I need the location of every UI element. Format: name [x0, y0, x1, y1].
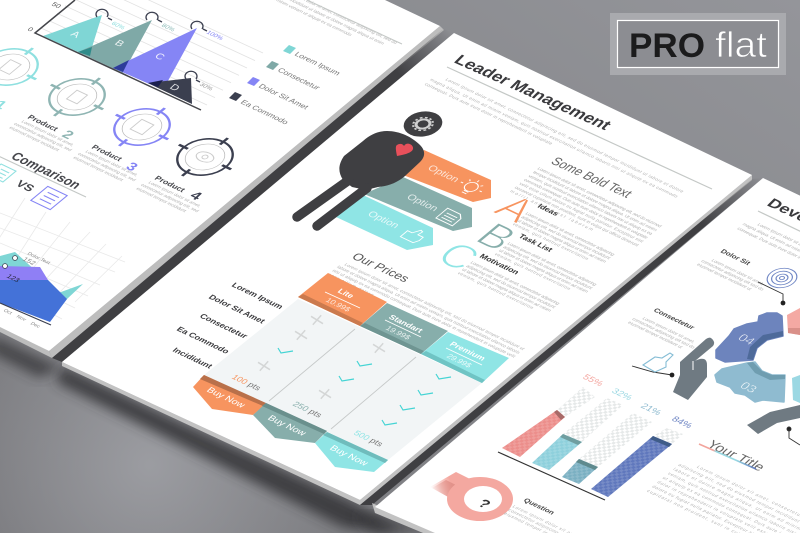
letters A B C: B [466, 215, 527, 258]
table row labels: Dolor Sit Amet [207, 293, 268, 325]
bar chart: triangle chart [26, 0, 263, 110]
callout: dolor sit: consectetur adipiscing elit sed do [700, 259, 766, 292]
callout: consectetur: Consectetur [652, 307, 696, 331]
callout: consectetur: eiusmod tempor incididunt ut [627, 320, 684, 349]
shadow under center page [56, 366, 400, 533]
button: buy now cyan: Buy Now [327, 444, 370, 468]
icon: document cyan [0, 164, 16, 182]
header: premium: 29.99$ [445, 352, 474, 369]
shadow under left page [0, 335, 62, 378]
option descriptions: Lorem ipsum dolor sit amet, consectetur adipiscing [524, 211, 616, 257]
gear segment 03: 03 [737, 380, 760, 395]
legend [229, 45, 343, 126]
option descriptions: adipiscing elit, sed do eiusmod tempor incididunt [502, 245, 594, 290]
option arrow teal: Option [404, 193, 440, 214]
option descriptions [457, 211, 617, 316]
icon: target product 2 [28, 66, 126, 128]
button: buy now teal [253, 403, 327, 443]
product labels [0, 98, 205, 203]
header: lite [298, 273, 387, 326]
header: premium [421, 332, 509, 383]
product descriptions: Lorem ipsum dolor sit amet, [84, 149, 139, 177]
header: standard [360, 303, 448, 354]
paragraph: commodo consequat. Duis aute irure dolor in reprehenderit in voluptate [523, 178, 650, 240]
option descriptions: Lorem ipsum dolor sit amet, consectetur adipiscing [469, 260, 561, 306]
gear segment 01 [787, 308, 800, 335]
icon: target [761, 265, 800, 291]
header: lite: 10.99$ [324, 296, 353, 313]
callout: dolor sit: eiusmod tempor incididunt ut [696, 262, 753, 291]
option arrow orange: Option [425, 164, 461, 185]
badge: PRO flat logo: flat [715, 24, 767, 65]
prices paragraph: esse cillum dolore [327, 272, 375, 297]
callout: consectetur: consectetur adipiscing elit sed do [631, 317, 697, 350]
button: buy now teal: Buy Now [265, 414, 308, 438]
product descriptions: consectetur adipiscing elit, sed [13, 122, 74, 152]
paragraph: veniam, quis nostrud exercitation ullamco laboris nisi ut aliquip ex ea [527, 174, 654, 236]
legend: Ea Commodo [239, 98, 291, 126]
panel: right page [372, 178, 800, 533]
icon: document blue [31, 186, 67, 210]
icon: gray hand upper [673, 338, 714, 400]
shadow under right page [355, 513, 440, 533]
bar chart: percentages: 84% [669, 415, 695, 431]
option descriptions: Lorem ipsum dolor sit amet, consectetur adipiscing [506, 241, 598, 287]
table row labels: Lorem Ipsum [230, 281, 286, 311]
product descriptions: eiusmod tempor incididunt [135, 187, 188, 213]
bar chart: triangle chart: B [112, 39, 126, 49]
product descriptions: Lorem ipsum dolor sit amet, [20, 119, 75, 147]
product labels: 3 [122, 160, 141, 174]
callout: dolor sit: Dolor Sit [719, 248, 753, 267]
our prices heading: Our Prices [349, 251, 412, 284]
badge: PRO flat logo [610, 13, 786, 75]
area chart: Dec [29, 321, 42, 330]
option descriptions: ut labore et dolore magna aliqua ut enim ad minim [516, 218, 608, 264]
button: buy now cyan [315, 432, 388, 472]
table row labels [171, 281, 286, 370]
paragraph: tempor incididunt ut labore et dolore magna aliqua. Ut enim ad minim [532, 170, 659, 232]
icon: target product 4 [156, 126, 254, 188]
intro text: Lorem ipsum dolor sit amet, consectetur adipiscing elit, sed do eiusmod tempor incididunt ut labore et dolore [444, 77, 685, 194]
bar chart: triangle chart: 60% [110, 21, 127, 31]
paragraph: velit esse cillum dolore eu fugiat nulla pariatur. Excepteur sint [518, 182, 645, 244]
gear segment 04: 04 [735, 332, 758, 347]
bar chart: triangle chart: 30% [198, 82, 215, 92]
icon: gray hand lower [747, 405, 800, 434]
callout: dolor sit [696, 248, 785, 305]
some bold text heading: Some Bold Text [547, 155, 635, 201]
points: 250 pts [291, 400, 325, 419]
bar chart: triangle chart: D [167, 83, 182, 93]
option descriptions: adipiscing elit, sed do eiusmod tempor incididunt [520, 215, 612, 260]
question block: Question [522, 497, 556, 516]
option descriptions: veniam, quis nostrud exercitation [494, 252, 572, 291]
option descriptions: ut labore et dolore magna aliqua ut enim ad minim [461, 267, 553, 313]
question block [430, 472, 583, 533]
letters A B C: A [485, 187, 547, 230]
bar chart: triangle chart: 80% [160, 23, 177, 33]
area chart: 152 [21, 256, 37, 267]
header: premium: Premium [448, 340, 488, 362]
bar chart: percentages: 21% [638, 402, 664, 418]
gear segment 02 [792, 375, 800, 403]
product descriptions [8, 118, 205, 217]
option labels [478, 202, 561, 276]
area chart: Nov [15, 314, 28, 323]
paragraph: occaecat cupidatat non proident, sunt in culpa qui officia deserunt [513, 185, 641, 247]
legend: Dolor Sit Amet [257, 82, 311, 111]
product labels: Product [90, 143, 124, 163]
product descriptions: eiusmod tempor incididunt [8, 126, 61, 152]
table row labels: Consectetur [198, 312, 251, 340]
points: 100 pts [230, 373, 264, 392]
intro text: magna aliqua. Ut enim ad minim veniam, quis nostrud exercitation ullamco laboris nisi ut aliquip ex ea commodo [429, 78, 680, 199]
letters A B C [427, 187, 547, 278]
option descriptions: ut labore et dolore magna aliqua ut enim ad minim [498, 248, 590, 294]
callout: consectetur: Lorem ipsum dolor sit amet, [641, 316, 696, 344]
your title paragraph: labore et dolore magna aliqua. Ut enim ad minim [672, 467, 800, 531]
bar chart: percentages: 55% [580, 373, 606, 389]
header: lite: Lite [336, 287, 357, 300]
comparison heading: Comparison [7, 150, 84, 192]
option descriptions: veniam, quis nostrud exercitation [512, 222, 590, 261]
table row labels: Incididunt [171, 346, 215, 370]
button: buy now orange: Buy Now [204, 386, 247, 410]
option arrow cyan [336, 195, 433, 250]
points [230, 373, 386, 448]
header: standard: 19.99$ [384, 324, 413, 341]
area chart [0, 198, 125, 330]
title: Leader Management [450, 52, 616, 133]
crosses [258, 315, 385, 399]
bar chart: triangle chart: 0 [26, 26, 35, 33]
your title heading: Your Title [703, 438, 768, 474]
legend: Consectetur [276, 66, 322, 92]
option arrow orange [403, 150, 491, 202]
callout: dolor sit: Lorem ipsum dolor sit amet, [710, 258, 765, 286]
badge: PRO flat logo: PRO [629, 27, 705, 65]
pricing table [193, 273, 509, 472]
bar chart: triangle chart: 50 [50, 1, 63, 10]
bar chart: percentages [498, 373, 695, 500]
callout connector [787, 427, 800, 445]
intro text: consequat. Duis aute irure dolor in reprehenderit in voluptate [423, 82, 554, 146]
button: buy now orange [193, 375, 266, 415]
legend: Lorem Ipsum [293, 50, 343, 77]
area chart: 123 [5, 273, 21, 284]
points: 500 pts [352, 429, 386, 448]
area chart: Oct [2, 308, 14, 316]
product descriptions: consectetur adipiscing elit, sed [140, 183, 201, 213]
person figure [297, 107, 450, 226]
product descriptions: Lorem ipsum dolor sit amet, [147, 180, 202, 208]
prices paragraph: nisi ut aliquip ex ea commodo consequat. Duis aute irure dolor in reprehenderit in voluptate velit [331, 269, 517, 359]
product labels: Product [26, 113, 60, 133]
panel: left page [0, 0, 454, 362]
bar chart: triangle chart: 100% [205, 30, 225, 42]
option labels: Motivation [478, 252, 521, 276]
bar chart: triangle chart: C [152, 52, 167, 63]
callout: consectetur [627, 307, 701, 377]
letters A B C: C [427, 234, 491, 278]
VS text: VS [13, 178, 38, 194]
icon: target product 1 [0, 36, 59, 98]
check marks [278, 348, 451, 425]
panel: center page [62, 33, 763, 505]
option descriptions: adipiscing elit, sed do eiusmod tempor incididunt [465, 264, 557, 309]
option descriptions: veniam, quis nostrud exercitation [457, 271, 535, 310]
option arrow teal [364, 177, 472, 231]
area chart: Dolor Text [26, 251, 52, 266]
product descriptions: eiusmod tempor incididunt [72, 156, 125, 182]
bar chart: triangle chart: A [68, 30, 82, 40]
paragraph: Lorem ipsum dolor sit amet, consectetur adipiscing elit, sed do eiusmod [536, 166, 663, 228]
product labels: Product [153, 174, 187, 194]
option labels: Ideas [536, 202, 561, 218]
product descriptions: consectetur adipiscing elit, sed [77, 152, 138, 182]
prices paragraph: Lorem ipsum dolor sit amet, consectetur adipiscing elit, sed do eiusmod tempor incididunt ut [343, 262, 527, 351]
question block: ? [474, 497, 494, 512]
paragraph: mollit anim id est laborum [509, 189, 595, 232]
icon: pointing hand [643, 353, 673, 372]
product labels: 4 [186, 189, 205, 203]
icon: heart [396, 144, 413, 156]
product labels: 2 [58, 128, 77, 142]
icon: target product 3 [93, 96, 191, 158]
bar chart: percentages: 32% [609, 387, 635, 403]
option arrow cyan: Option [365, 210, 401, 231]
table row labels: Ea Commodo [175, 325, 232, 355]
option labels: Task List [517, 232, 555, 254]
icon: head with gear [396, 107, 450, 141]
gear diagram [715, 308, 800, 403]
header: standard: Standart [387, 313, 425, 335]
paragraph [509, 166, 664, 251]
prices paragraph: labore et dolore magna aliqua. Ut enim ad minim veniam, quis nostrud exercitation ullamco laboris [336, 265, 522, 355]
